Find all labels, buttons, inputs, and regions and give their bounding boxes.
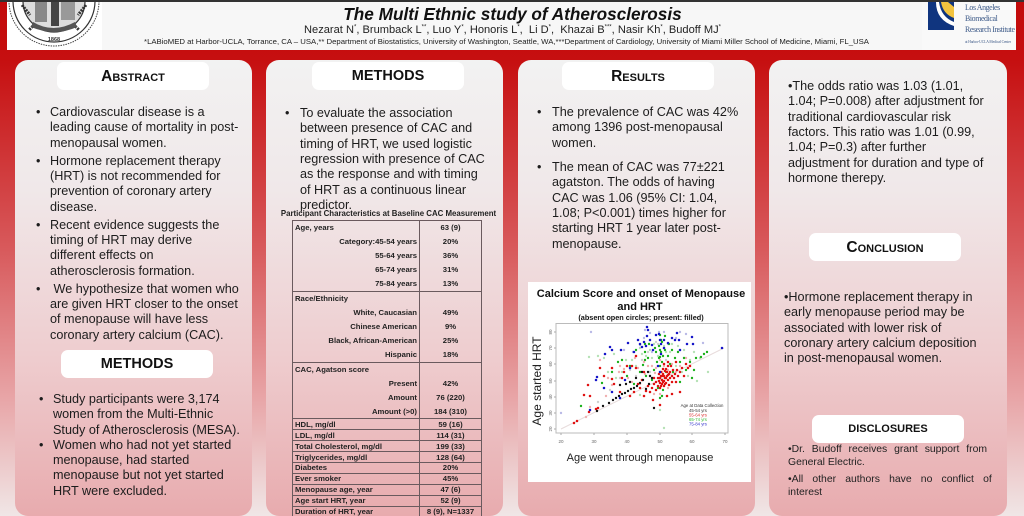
discussion text: •The odds ratio was 1.03 (1.01, xyxy=(788,79,963,93)
results text: women. The mean of CAC was 77±221 xyxy=(552,136,725,174)
participant characteristics table: 20% xyxy=(443,237,458,246)
abstract bullets: leading cause of mortality in post- xyxy=(50,120,238,134)
disclosures text: interest xyxy=(788,487,822,498)
chart title: Calcium Score and onset of Menopause xyxy=(537,288,745,300)
y tick labels xyxy=(548,329,553,432)
abstract bullets: menopausal women. xyxy=(50,136,167,150)
axis labels xyxy=(530,336,713,464)
participant characteristics table: 55-64 years xyxy=(375,251,417,260)
participant characteristics table: 75-84 years xyxy=(375,279,417,288)
participant characteristics table: 63 (9) xyxy=(440,223,461,232)
participant characteristics table: Race/Ethnicity xyxy=(295,294,348,303)
abstract bullets: disease. xyxy=(50,200,97,214)
participant characteristics table: 13% xyxy=(443,279,458,288)
participant characteristics table: Diabetes xyxy=(295,463,327,472)
participant characteristics table: Category:45-54 years xyxy=(339,237,417,246)
abstract bullets: timing of HRT may derive xyxy=(50,233,192,247)
discussion text: adjustment for duration and type of xyxy=(788,156,983,170)
authors: Nezarat N*, Brumback L**, Luo Y*, Honoris L*, Li D*, Khazai B***, Nasir Kh*, Budoff MJ* xyxy=(304,24,721,36)
logo text: Biomedical xyxy=(965,14,997,23)
disclosures text xyxy=(788,444,992,498)
heading: conclusion: Conclusion xyxy=(846,239,924,256)
participant characteristics table: 47 (6) xyxy=(440,485,461,494)
participant characteristics table xyxy=(292,220,482,516)
conclusion text: •Hormone replacement therapy in xyxy=(784,290,973,304)
participant characteristics table: 20% xyxy=(443,463,458,472)
participant characteristics table: 59 (16) xyxy=(438,420,463,429)
participant characteristics table: 52 (9) xyxy=(440,496,461,505)
conclusion text: in post-menopausal women. xyxy=(784,351,942,365)
y tick labels: 30 xyxy=(548,410,553,416)
abstract bullets: prevention of coronary artery xyxy=(50,184,212,198)
results text: starting HRT 1 year later post- xyxy=(552,221,721,235)
methods bullets: women from the Multi-Ethnic xyxy=(53,407,213,421)
participant characteristics table: 42% xyxy=(443,379,458,388)
chart title: and HRT xyxy=(617,301,663,313)
plot frame and axes xyxy=(554,324,728,444)
heading: results: Results xyxy=(611,68,665,85)
participant characteristics table: Total Cholesterol, mg/dl xyxy=(295,442,382,451)
methods bullets: HRT were excluded. xyxy=(53,484,167,498)
participant characteristics table: 49% xyxy=(443,308,458,317)
participant characteristics table: Amount xyxy=(388,393,417,402)
abstract bullets: different effects on xyxy=(50,248,154,262)
y tick labels: 50 xyxy=(548,378,553,384)
header band xyxy=(7,2,1016,50)
participant characteristics table: 76 (220) xyxy=(436,393,465,402)
legend: 65-74 yrs xyxy=(689,417,707,422)
participant characteristics table: 36% xyxy=(443,251,458,260)
participant characteristics table: 184 (310) xyxy=(434,407,467,416)
icon: university seal: 1868 xyxy=(48,37,60,43)
y tick labels: 60 xyxy=(548,361,553,367)
results text: CAC was 1.06 (95% CI: 1.04, xyxy=(552,191,717,205)
participant characteristics table: White, Caucasian xyxy=(353,308,417,317)
heading: disclosures: DISCLOSURES xyxy=(848,423,928,435)
chart title: (absent open circles; present: filled) xyxy=(578,313,704,322)
methods bullets: menopause but not yet started xyxy=(53,468,224,482)
results text: among 1396 post-menopausal xyxy=(552,120,723,134)
participant characteristics table: Duration of HRT, year xyxy=(295,507,373,516)
participant characteristics table: Chinese American xyxy=(350,322,417,331)
legend: 45-54 yrs xyxy=(689,408,707,413)
abstract bullets xyxy=(36,105,239,342)
chart title xyxy=(537,288,745,322)
participant characteristics table: Amount (>0) xyxy=(372,407,417,416)
methods text: as the response and with timing xyxy=(300,167,478,181)
scatter points xyxy=(561,327,722,428)
results text: 1.08; P<0.001) times higher for xyxy=(552,206,726,220)
plot frame and axes: 50 xyxy=(657,439,663,444)
top dark edge xyxy=(0,0,1024,2)
heading: methods: METHODS xyxy=(352,68,424,84)
abstract bullets: (HRT) is not recommended for xyxy=(50,169,220,183)
conclusion text: associated with lower risk of xyxy=(784,321,941,335)
logo text: Los Angeles xyxy=(965,3,1000,12)
participant characteristics table: Present xyxy=(389,379,417,388)
results text: • xyxy=(537,105,541,119)
results text: • xyxy=(537,160,541,174)
participant characteristics table: 128 (64) xyxy=(436,452,465,462)
participant characteristics table: 31% xyxy=(443,265,458,274)
poster title: The Multi Ethnic study of Atherosclerosis xyxy=(343,4,682,24)
methods text: regression with presence of CAC xyxy=(300,152,485,166)
abstract bullets: • xyxy=(36,154,40,168)
plot frame and axes: 20 xyxy=(558,439,564,444)
participant characteristics table: 65-74 years xyxy=(375,265,417,274)
plot frame and axes: 40 xyxy=(624,439,630,444)
methods text xyxy=(285,106,485,212)
heading: methods xyxy=(312,62,464,90)
results text: The prevalence of CAC was 42% xyxy=(552,105,738,119)
methods bullets: • xyxy=(39,438,43,452)
legend: 75-84 yrs xyxy=(689,422,707,426)
discussion text xyxy=(788,79,984,185)
axis labels: Age started HRT xyxy=(530,336,544,426)
methods bullets: Women who had not yet started xyxy=(53,438,231,452)
axis labels: Age went through menopause xyxy=(567,452,713,464)
results text: menopause. xyxy=(552,237,622,251)
abstract bullets: Cardiovascular disease is a xyxy=(50,105,205,119)
disclosures text: General Electric. xyxy=(788,457,865,468)
affiliations: *LABioMED at Harbor-UCLA, Torrance, CA – USA,** Department of Biostatistics, University of Washington, Seattle, WA,***Department of Cardiology, University of Miami Miller School of Medicine, Miami, FL_USA xyxy=(144,37,869,46)
discussion text: 1.04; P=0.3) after further xyxy=(788,140,926,154)
methods text: timing of HRT, we used logistic xyxy=(300,137,472,151)
heading: methods (left column) xyxy=(61,350,213,378)
abstract bullets: We hypothesize that women who xyxy=(54,282,239,296)
scatter chart card xyxy=(528,282,751,482)
abstract bullets: of menopause will have less xyxy=(50,312,208,326)
discussion text: factors. This ratio was 1.01 (0.99, xyxy=(788,125,975,139)
participant characteristics table: 25% xyxy=(443,336,458,345)
methods text: • xyxy=(285,106,289,120)
participant characteristics table: Triglycerides, mg/dl xyxy=(295,452,367,462)
y tick labels: 80 xyxy=(548,329,553,335)
legend: 55-64 yrs xyxy=(689,412,707,418)
conclusion text xyxy=(784,290,977,365)
discussion text: hormone therepy. xyxy=(788,171,886,185)
y tick labels: 20 xyxy=(548,426,553,432)
conclusion text: coronary artery calcium deposition xyxy=(784,336,977,350)
participant characteristics table: 18% xyxy=(443,350,458,359)
plot frame and axes: 30 xyxy=(591,439,597,444)
methods bullets: Study of Atherosclerosis (MESA). xyxy=(53,423,240,437)
results text xyxy=(537,105,738,251)
discussion text: traditional cardiovascular risk xyxy=(788,110,951,124)
participant characteristics table: LDL, mg/dl xyxy=(295,431,335,440)
table title: Participant Characteristics at Baseline CAC Measurement xyxy=(281,209,496,218)
abstract bullets: atherosclerosis formation. xyxy=(50,264,195,278)
disclosures text: •Dr. Budoff receives grant support from xyxy=(788,444,987,455)
conclusion text: early menopause period may be xyxy=(784,305,965,319)
participant characteristics table: Age start HRT, year xyxy=(295,496,366,505)
methods bullets xyxy=(39,392,240,498)
heading: abstract xyxy=(57,62,209,90)
methods text: predictor. xyxy=(300,198,352,212)
heading: disclosures xyxy=(812,415,964,443)
participant characteristics table: Ever smoker xyxy=(295,474,341,483)
panel: abstract xyxy=(15,60,252,516)
panel: discussion and conclusion xyxy=(769,60,1007,516)
abstract bullets: • xyxy=(36,282,40,296)
y tick labels: 40 xyxy=(548,394,553,400)
icon: university seal xyxy=(8,2,100,46)
logo text xyxy=(965,3,1015,44)
participant characteristics table: 199 (33) xyxy=(436,442,465,451)
discussion text: 1.04; P=0.008) after adjustment for xyxy=(788,94,984,108)
methods text: between presence of CAC and xyxy=(300,121,472,135)
heading: abstract: Abstract xyxy=(101,68,165,85)
participant characteristics table: Age, years xyxy=(295,223,334,232)
panel: methods xyxy=(266,60,503,516)
heading: methods (left column): METHODS xyxy=(101,356,173,372)
panel: results xyxy=(518,60,755,516)
abstract bullets: • xyxy=(36,218,40,232)
abstract bullets: • xyxy=(36,105,40,119)
abstract bullets: coronary artery calcium (CAC). xyxy=(50,328,224,342)
abstract bullets: are given HRT closer to the onset xyxy=(50,297,238,311)
participant characteristics table: CAC, Agatson score xyxy=(295,365,369,374)
participant characteristics table: 114 (31) xyxy=(436,431,465,440)
heading: conclusion xyxy=(809,233,961,261)
methods text: To evaluate the association xyxy=(300,106,452,120)
participant characteristics table: 9% xyxy=(445,322,456,331)
methods bullets: Study participants were 3,174 xyxy=(53,392,220,406)
plot frame and axes: 60 xyxy=(689,439,695,444)
icon: LA BioMed logo xyxy=(922,2,1016,50)
methods bullets: • xyxy=(39,392,43,406)
participant characteristics table: Menopause age, year xyxy=(295,485,373,494)
results text: agatston. The odds of having xyxy=(552,175,715,189)
disclosures text: •All other authors have no conflict of xyxy=(788,474,992,485)
legend xyxy=(681,403,724,426)
legend: Age at Data Collection xyxy=(681,403,724,408)
participant characteristics table: 8 (9), N=1337 xyxy=(427,507,474,516)
logo text: at Harbor-UCLA Medical Center xyxy=(965,40,1011,44)
abstract bullets: Recent evidence suggests the xyxy=(50,218,219,232)
logo text: Research Institute xyxy=(965,25,1015,34)
participant characteristics table: Black, African-American xyxy=(328,336,417,345)
plot frame and axes: 70 xyxy=(722,439,728,444)
participant characteristics table: Hispanic xyxy=(385,350,417,359)
y tick labels: 70 xyxy=(548,345,553,351)
participant characteristics table: HDL, mg/dl xyxy=(295,420,336,429)
participant characteristics table: 45% xyxy=(443,474,458,483)
methods text: of HRT as a continuous linear xyxy=(300,183,466,197)
methods bullets: menopause, had started xyxy=(53,453,189,467)
heading: results xyxy=(562,62,714,90)
abstract bullets: Hormone replacement therapy xyxy=(50,154,221,168)
